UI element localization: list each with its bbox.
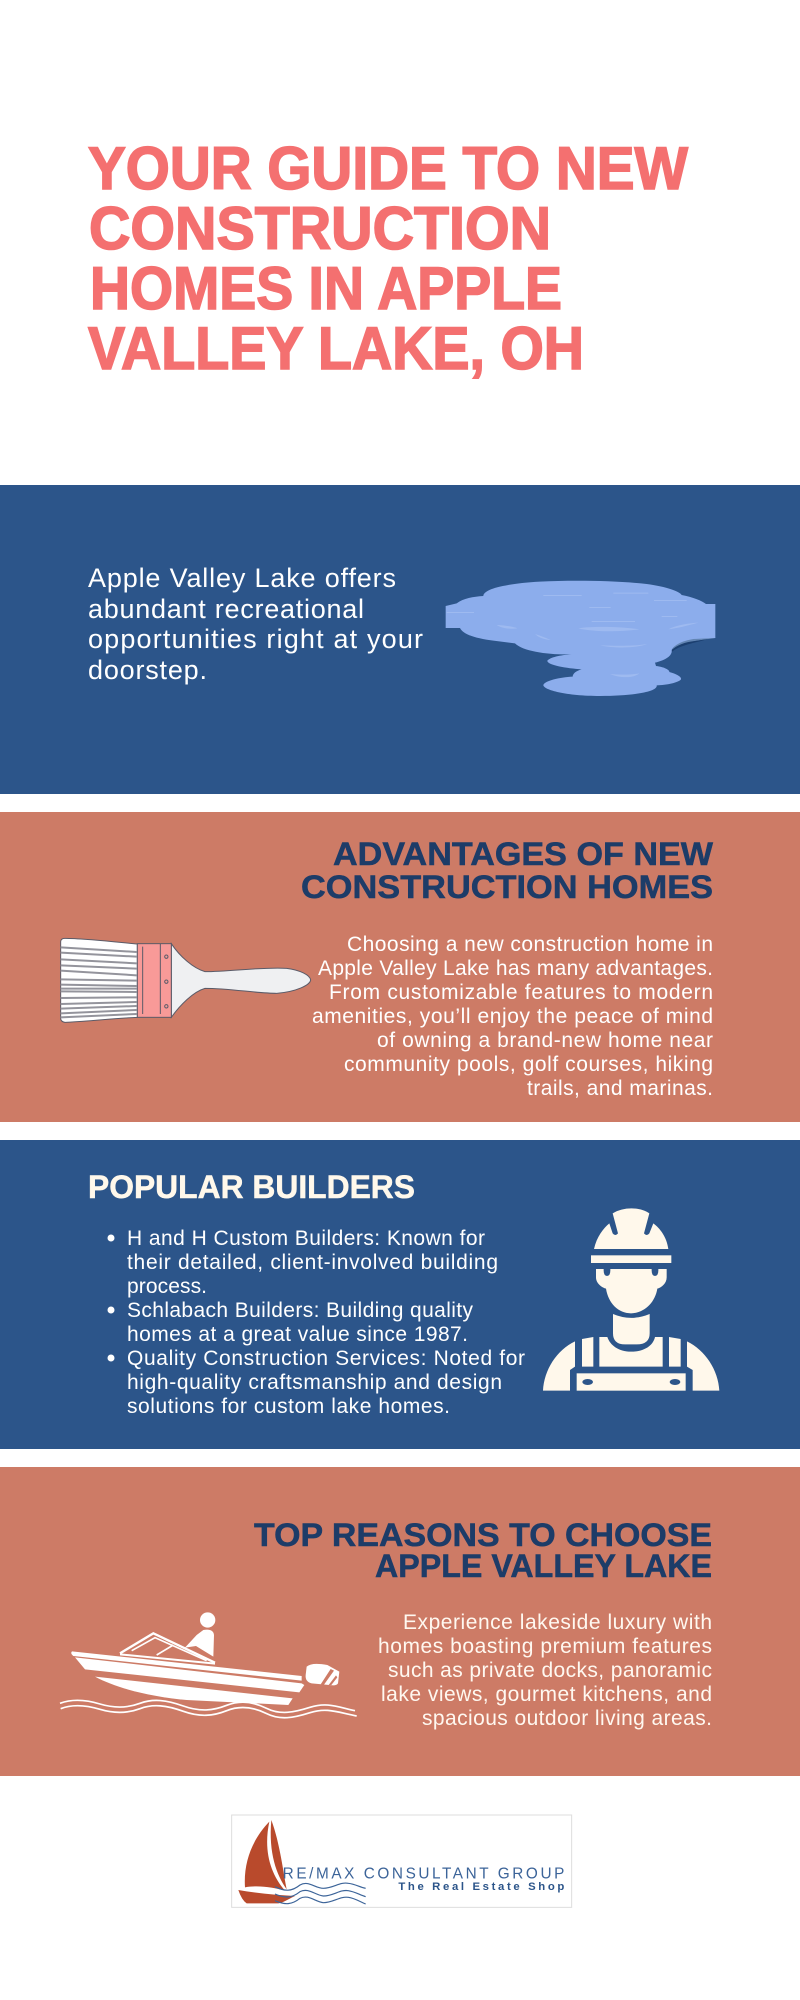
heading: advantages: CONSTRUCTION HOMES (301, 869, 713, 905)
icon: lake (446, 581, 715, 696)
advantages text: of owning a brand-new home near (377, 1029, 713, 1052)
intro text: doorstep. (88, 655, 207, 685)
builders list: solutions for custom lake homes. (127, 1395, 450, 1418)
advantages text (312, 933, 713, 1100)
intro text (88, 563, 423, 685)
reasons text: spacious outdoor living areas. (422, 1707, 712, 1730)
heading: popular builders: POPULAR BUILDERS (88, 1169, 415, 1205)
intro text: opportunities right at your (88, 624, 423, 654)
advantages text: Choosing a new construction home in (347, 933, 713, 956)
logo: text: RE/MAX CONSULTANT GROUP (283, 1866, 564, 1883)
builders list: process. (127, 1275, 207, 1298)
advantages text: trails, and marinas. (527, 1077, 713, 1100)
builders list: Schlabach Builders: Building quality (127, 1299, 474, 1322)
advantages text: Apple Valley Lake has many advantages. (318, 957, 713, 980)
logo: waves (275, 1883, 366, 1904)
advantages text: community pools, golf courses, hiking (344, 1053, 713, 1076)
panel: intro (0, 485, 800, 794)
advantages text: amenities, you’ll enjoy the peace of mind (312, 1005, 713, 1028)
heading: top reasons: APPLE VALLEY LAKE (375, 1548, 712, 1584)
reasons text: such as private docks, panoramic (388, 1659, 712, 1682)
builders list: their detailed, client-involved building (127, 1251, 498, 1274)
title: YOUR GUIDE TO NEW (88, 135, 688, 202)
panel: advantages (0, 812, 800, 1122)
title: CONSTRUCTION (89, 195, 551, 262)
intro text: abundant recreational (88, 594, 364, 624)
logo: text: The Real Estate Shop (398, 1881, 564, 1893)
intro text: Apple Valley Lake offers (88, 563, 396, 593)
builders list: H and H Custom Builders: Known for (127, 1227, 485, 1250)
reasons text (378, 1611, 712, 1730)
icon: motor boat (60, 1612, 357, 1718)
heading: top reasons (254, 1517, 712, 1584)
builders list (108, 1227, 525, 1418)
reasons text: Experience lakeside luxury with (403, 1611, 712, 1634)
panel: top reasons (0, 1467, 800, 1776)
builders list: Quality Construction Services: Noted for (127, 1347, 525, 1370)
title: VALLEY LAKE, OH (88, 315, 584, 382)
icon: paint brush (61, 938, 311, 1022)
advantages text: From customizable features to modern (329, 981, 713, 1004)
logo (232, 1815, 572, 1907)
reasons text: homes boasting premium features (378, 1635, 712, 1658)
logo: sailboat (238, 1820, 295, 1903)
heading: top reasons: TOP REASONS TO CHOOSE (254, 1517, 712, 1553)
builders list: high-quality craftsmanship and design (127, 1371, 502, 1394)
title (88, 135, 688, 382)
reasons text: lake views, gourmet kitchens, and (381, 1683, 712, 1706)
icon: construction worker (543, 1208, 719, 1391)
title: HOMES IN APPLE (90, 255, 562, 322)
heading: advantages: ADVANTAGES OF NEW (333, 836, 714, 872)
logo: text (283, 1866, 564, 1893)
panel: popular builders (0, 1140, 800, 1449)
heading: advantages (301, 836, 714, 905)
builders list: homes at a great value since 1987. (127, 1323, 468, 1346)
